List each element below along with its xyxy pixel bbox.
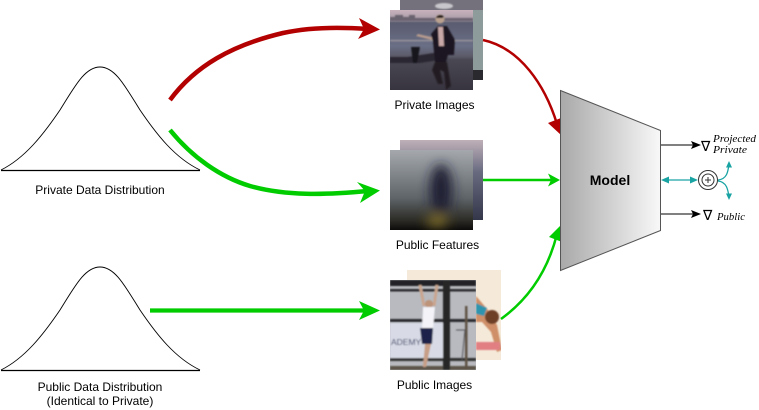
arrow: private distribution to public features [170,130,380,203]
teal double arrow and combine symbol [661,161,732,200]
label: public features: Public Features [396,238,479,252]
label: projected private gradient: Projected [712,134,757,145]
arrow: public images to model [501,225,562,319]
bell curve: public data distribution [1,267,200,370]
image stack: public images [390,270,502,370]
label: projected private gradient: ∇ [700,139,711,155]
label: public data distribution: (Identical to Private) [47,394,153,408]
label: public images: Public Images [397,378,472,392]
image stack: public features [390,140,483,230]
label: public gradient [702,208,745,224]
label: projected private gradient: Private [712,145,748,156]
label: private data distribution: Private Data Distribution [35,183,165,197]
arrow: public distribution to public images [150,301,380,320]
label: projected private gradient [700,134,757,156]
arrow: private distribution to private images [170,18,380,100]
label: public gradient: Public [716,212,745,223]
arrow: projected private gradient [661,144,700,146]
model trapezoid: Model [590,172,630,188]
label: private images: Private Images [394,98,475,112]
bell curve: private data distribution [1,67,200,170]
label: public data distribution [38,380,162,408]
image stack: private images [390,0,483,90]
label: public data distribution: Public Data Distribution [38,380,162,394]
image stack: public images: ADEMY [391,337,422,347]
model trapezoid [560,90,660,270]
label: public gradient: ∇ [702,208,713,224]
arrow: private images to model [483,40,561,135]
arrow: public features to model [483,174,560,186]
arrow: public gradient [661,213,700,215]
